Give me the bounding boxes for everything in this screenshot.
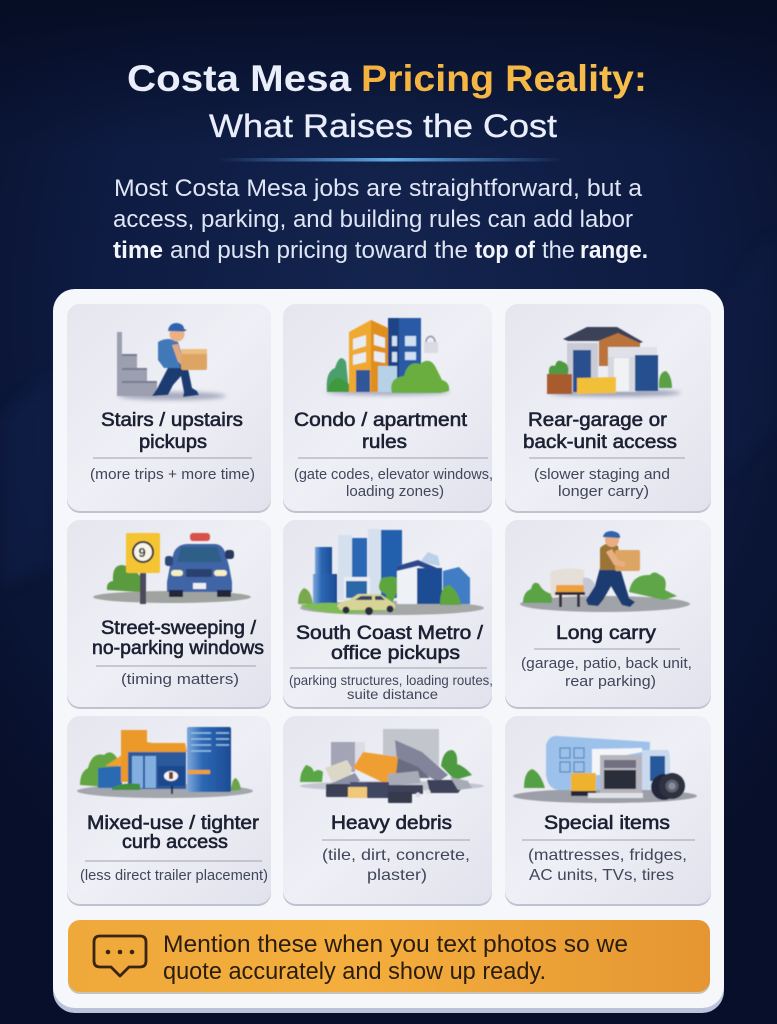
intro paragraph: Most Costa Mesa jobs are straightforward, but a: [114, 175, 643, 202]
icon: appliances and tires: [513, 736, 697, 803]
icon: worker carrying box: [520, 531, 690, 612]
panel: rear garage: [505, 304, 711, 513]
heading: [87, 812, 260, 853]
panel: stairs: [67, 304, 271, 513]
heading: no-parking windows: [92, 637, 264, 659]
panel: south coast metro: [283, 520, 493, 709]
intro paragraph: and push pricing toward the: [170, 237, 468, 264]
heading: office pickups: [331, 642, 460, 664]
icon: parking sign and car: 9: [138, 545, 146, 560]
callout text: Mention these when you text photos so we: [163, 931, 628, 958]
title line 1: Costa Mesa: [127, 58, 351, 99]
panel: special items: [505, 716, 711, 906]
heading: Street-sweeping /: [101, 617, 257, 639]
heading: pickups: [139, 431, 207, 453]
heading: South Coast Metro /: [296, 622, 484, 644]
intro paragraph: [113, 175, 648, 264]
callout banner: [68, 920, 710, 994]
icon: speech bubble: [94, 936, 146, 976]
heading: Heavy debris: [331, 812, 452, 834]
heading: Special items: [544, 812, 670, 834]
icon: parking sign and car: [93, 533, 251, 604]
panel: long carry: [505, 520, 711, 709]
heading: [92, 617, 264, 659]
detail text: (less direct trailer placement): [80, 867, 268, 884]
callout text: [163, 931, 628, 985]
main white panel: [53, 289, 724, 1013]
detail text: (parking structures, loading routes,: [289, 672, 493, 688]
intro paragraph: access, parking, and building rules can add labor: [113, 206, 633, 233]
detail text: (more trips + more time): [90, 466, 255, 483]
detail text: (tile, dirt, concrete,: [322, 847, 470, 864]
heading: Stairs / upstairs: [101, 409, 243, 431]
detail text: (mattresses, fridges,: [528, 847, 687, 864]
detail text: rear parking): [565, 673, 656, 690]
icon: house with garage: [547, 327, 681, 396]
icon: apartment buildings: [326, 318, 450, 396]
heading: Rear-garage or: [528, 409, 668, 431]
icon: mixed-use building: [77, 727, 253, 798]
detail text: [534, 466, 670, 500]
detail text: [289, 672, 493, 702]
intro paragraph: the: [542, 237, 575, 264]
detail text: (slower staging and: [534, 466, 670, 483]
detail text: suite distance: [347, 686, 438, 702]
detail text: [521, 655, 692, 690]
panel: condo: [283, 304, 493, 513]
callout text: quote accurately and show up ready.: [163, 958, 546, 985]
heading: [101, 409, 243, 453]
heading: curb access: [122, 831, 228, 853]
intro paragraph: range.: [580, 237, 648, 264]
detail text: [528, 847, 687, 884]
title highlight: Pricing Reality:: [361, 58, 647, 99]
heading: [294, 409, 468, 453]
panel: mixed-use: [67, 716, 271, 906]
detail text: AC units, TVs, tires: [529, 867, 674, 884]
detail text: (garage, patio, back unit,: [521, 655, 692, 672]
heading: back-unit access: [523, 431, 677, 453]
intro paragraph: time: [113, 237, 163, 264]
detail text: (gate codes, elevator windows,: [294, 466, 493, 483]
heading: [296, 622, 484, 664]
heading: [523, 409, 677, 453]
heading: Mixed-use / tighter: [87, 812, 260, 834]
heading: rules: [362, 431, 407, 453]
panel: street sweeping: [67, 520, 271, 709]
icon: worker on stairs: [117, 323, 226, 400]
title block: [127, 58, 647, 144]
icon: office towers with car: [298, 529, 484, 615]
panel: heavy debris: [283, 716, 492, 906]
detail text: [294, 466, 493, 500]
detail text: loading zones): [346, 483, 444, 500]
heading: Condo / apartment: [294, 409, 468, 431]
subtitle: What Raises the Cost: [209, 108, 557, 144]
detail text: (timing matters): [121, 671, 239, 688]
icon: debris pile: [300, 729, 484, 803]
detail text: [322, 847, 470, 884]
detail text: longer carry): [558, 483, 649, 500]
heading: Long carry: [556, 622, 656, 644]
intro paragraph: top of: [475, 237, 536, 264]
detail text: plaster): [367, 867, 427, 884]
